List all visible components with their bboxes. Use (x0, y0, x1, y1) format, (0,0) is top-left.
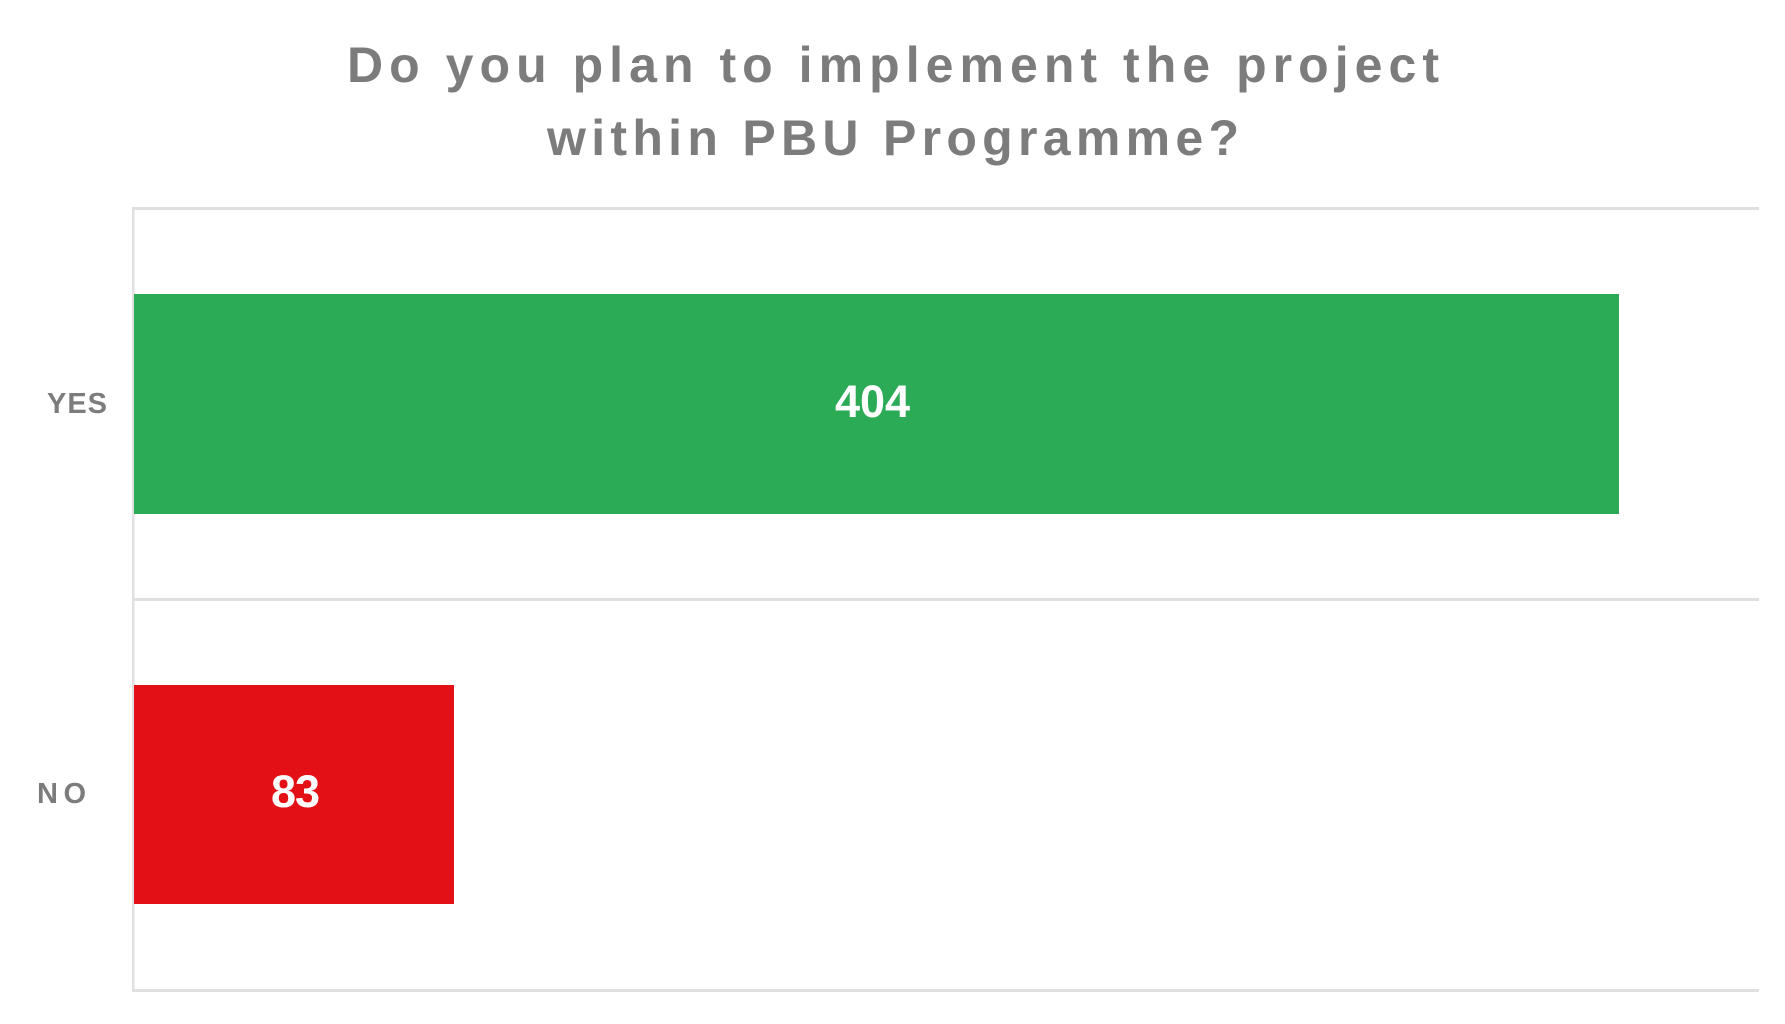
bar: NO (134, 685, 454, 904)
title (347, 37, 1439, 166)
title: within PBU Programme? (546, 110, 1239, 166)
title: Do you plan to implement the project (347, 37, 1439, 93)
bar: YES: 404 (835, 376, 910, 427)
axis label: NO: NO (37, 778, 86, 810)
axis label: YES: YES (47, 388, 107, 420)
bar: NO: 83 (271, 766, 320, 817)
bar: YES (134, 294, 1619, 514)
